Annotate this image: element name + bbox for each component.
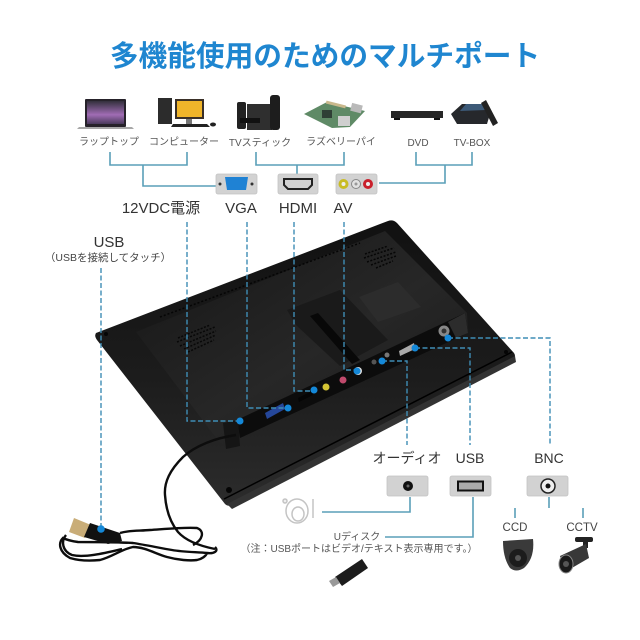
label: 12VDC power: 12VDC電源 (122, 200, 200, 217)
USB plug (69, 518, 91, 538)
label: VGA: VGA (225, 200, 257, 217)
text: USB port note: （注：USBポートはビデオ/テキスト表示専用です。） (240, 542, 478, 555)
connector: BNC stub (548, 497, 550, 508)
callout: HDMI pointer (294, 222, 318, 394)
right speaker grille (364, 246, 396, 268)
connector: TV stick and Raspberry Pi to HDMI (256, 152, 344, 175)
mounting plate (287, 290, 388, 366)
icon: DVD player (391, 111, 443, 120)
USB socket (399, 343, 415, 356)
label: TV stick: TVスティック (229, 137, 291, 149)
label: HDMI: HDMI (279, 200, 317, 217)
label: laptop: ラップトップ (79, 136, 139, 148)
label: USB touch: USB (94, 234, 124, 251)
screw holes (104, 332, 108, 336)
HDMI socket (298, 391, 313, 402)
label: USB touch: （USBを接続してタッチ） (45, 251, 171, 264)
label: AV: AV (334, 200, 352, 217)
icon: Raspberry Pi (304, 101, 365, 128)
icon: earphones (283, 499, 313, 523)
icon: dome camera (503, 539, 533, 570)
callout: USB pointer (412, 344, 470, 445)
icon: laptop (77, 99, 134, 129)
label: CCD: CCD (503, 522, 527, 534)
connector: CCD stub (514, 508, 516, 518)
port strip (237, 313, 468, 438)
audio jacks (372, 360, 376, 364)
USB cable (60, 435, 236, 561)
power bracket (223, 420, 240, 449)
label: CCTV: CCTV (566, 522, 598, 534)
callout: AV pointer (344, 222, 360, 374)
callout: VGA pointer (247, 222, 292, 412)
icon: AV port (336, 174, 377, 194)
BNC socket (438, 326, 450, 336)
connector: USB to U disk (385, 497, 473, 537)
AV jacks (322, 384, 330, 390)
callout: BNC pointer (444, 334, 550, 444)
label: USB: USB (456, 450, 484, 466)
icon: HDMI port (278, 174, 318, 194)
icon: BNC port (527, 476, 568, 496)
label: USB touch (45, 234, 171, 264)
raised back plate (136, 231, 468, 447)
callout: USB touch pointer (97, 268, 105, 533)
icon: desktop computer (158, 98, 216, 127)
left speaker grille (177, 325, 216, 352)
icon: VGA port (216, 174, 257, 194)
connector: DVD and TV-BOX to AV (379, 152, 472, 183)
connector: laptop and computer to VGA (110, 152, 216, 186)
label: computer: コンピューター (149, 136, 219, 148)
label: audio: オーディオ (372, 450, 442, 466)
title: 多機能使用のためのマルチポート (110, 41, 540, 73)
label: Raspberry Pi: ラズベリーパイ (306, 135, 376, 148)
label plate (359, 282, 421, 322)
icon: USB stick (329, 559, 368, 587)
callout: audio pointer (378, 358, 407, 445)
connector: audio to earphones (322, 497, 410, 512)
label: TV-BOX: TV-BOX (454, 138, 491, 149)
icon: TV stick (237, 95, 280, 130)
icon: bullet camera (559, 537, 593, 573)
icon: TV box (451, 100, 498, 126)
label: DVD: DVD (407, 138, 429, 149)
label: BNC: BNC (534, 450, 564, 466)
icon: audio port (387, 476, 428, 496)
connector: CCTV stub (582, 508, 584, 518)
callout: 12VDC power pointer (187, 222, 244, 424)
label: U disk: Uディスク (334, 530, 380, 543)
monitor back (95, 220, 516, 509)
VGA connector (265, 403, 285, 419)
icon: USB port (450, 476, 491, 496)
